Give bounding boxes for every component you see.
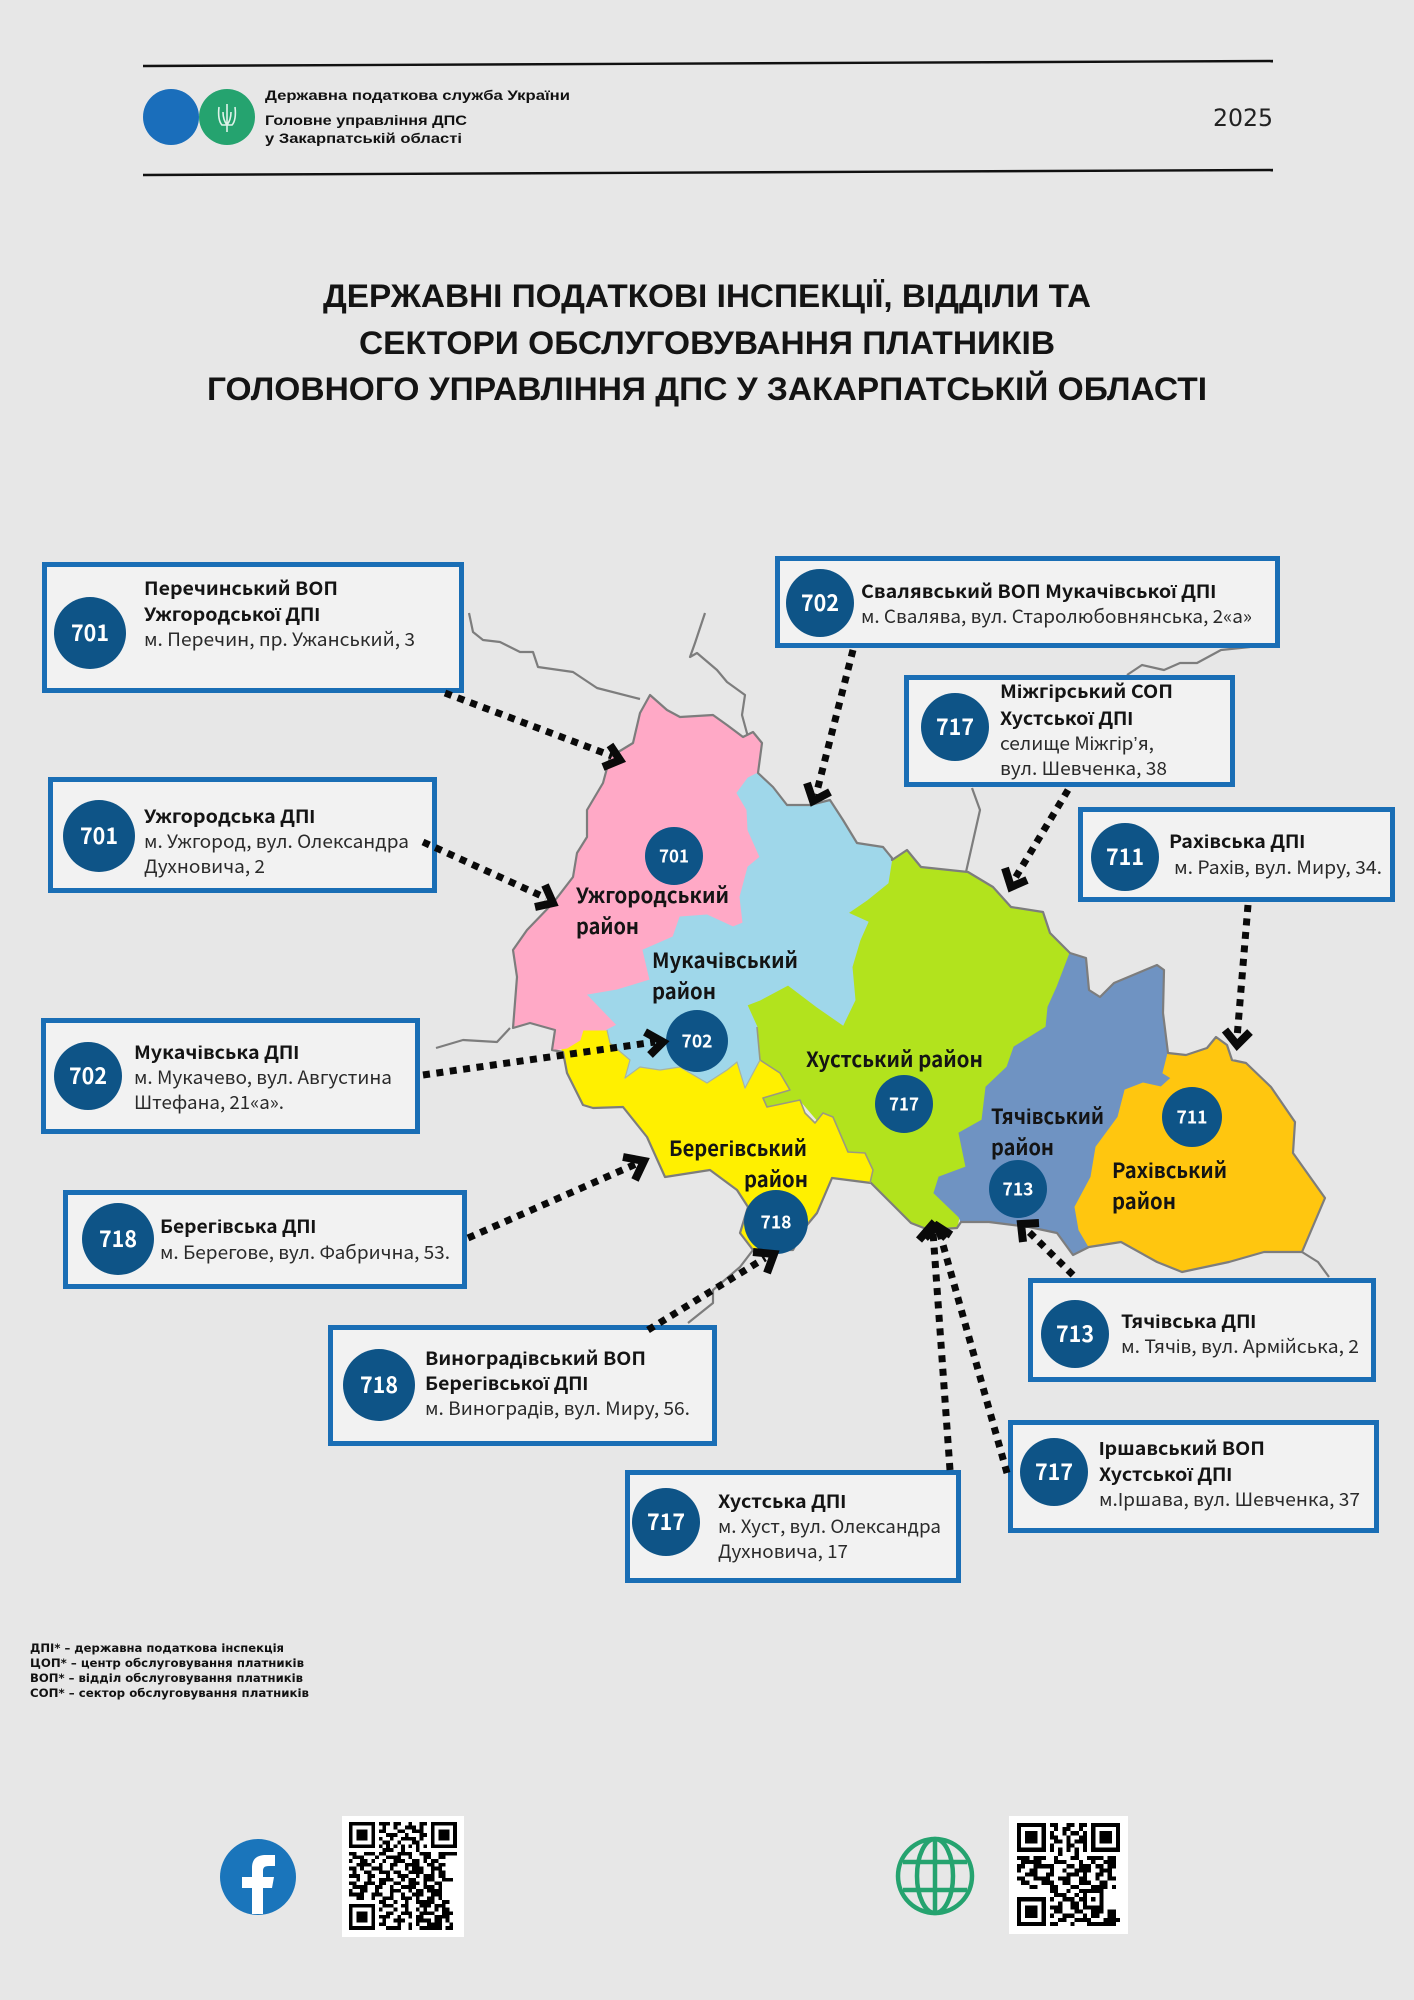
district labels: Рахівський <box>1112 1155 1227 1185</box>
title: СЕКТОРИ ОБСЛУГОВУВАННЯ ПЛАТНИКІВ <box>359 325 1055 361</box>
callout: Vynohradiv: м. Виноградів, вул. Миру, 56. <box>425 1395 690 1421</box>
callout: Uzhhorod: м. Ужгород, вул. Олександра <box>144 828 409 854</box>
callout: Mukachevo: Штефана, 21«а». <box>134 1089 284 1115</box>
icon: globe <box>898 1839 972 1913</box>
callout: Vynohradiv: Виноградівський ВОП <box>425 1345 646 1371</box>
callout: Uzhhorod: 701 <box>80 817 118 851</box>
district labels: район <box>744 1164 808 1194</box>
QR code: website <box>1009 1816 1128 1934</box>
callout: Uzhhorod <box>50 780 434 890</box>
organisation name: у Закарпатській області <box>265 130 462 146</box>
organisation name: Державна податкова служба України <box>265 87 570 103</box>
callout: Vynohradiv: Берегівської ДПІ <box>425 1370 588 1396</box>
map code badges: 717 <box>889 1090 919 1116</box>
map of Zakarpattia districts <box>436 613 1329 1323</box>
callout: Khust <box>628 1472 958 1580</box>
district labels: Берегівський <box>669 1133 807 1163</box>
callout: Tiachiv: Тячівська ДПІ <box>1121 1308 1256 1334</box>
arrow: Irshava to map <box>925 1226 1007 1473</box>
callout: Perechyn: Ужгородської ДПІ <box>144 601 320 627</box>
header band <box>143 61 1273 175</box>
callout: Irshava: Іршавський ВОП <box>1099 1435 1265 1461</box>
map code badges: 701 <box>659 842 689 868</box>
callout: Irshava <box>1010 1422 1376 1530</box>
callout: Mukachevo: Мукачівська ДПІ <box>134 1039 299 1065</box>
district: Berehove <box>558 1015 873 1250</box>
neighbouring border lines <box>436 613 1329 1323</box>
year: 2025 <box>1213 104 1273 132</box>
callout: Khust: Духновича, 17 <box>718 1538 848 1564</box>
arrow: Vynohradiv to badge <box>648 1252 774 1330</box>
arrow: Rakhiv to map <box>1225 905 1250 1045</box>
callout: Berehove <box>66 1192 464 1286</box>
callout: Mizhhiria: Хустської ДПІ <box>1000 705 1133 731</box>
callout: Mizhhiria <box>906 678 1232 784</box>
title: ГОЛОВНОГО УПРАВЛІННЯ ДПС У ЗАКАРПАТСЬКІЙ ОБЛАСТІ <box>207 371 1207 407</box>
footnote abbreviations: ВОП* – відділ обслуговування платників <box>30 1671 303 1685</box>
district labels: Хустський район <box>806 1044 983 1074</box>
footnote abbreviations: ЦОП* – центр обслуговування платників <box>30 1656 304 1670</box>
arrow: Perechyn to map <box>445 693 620 767</box>
callout: Perechyn: м. Перечин, пр. Ужанський, 3 <box>144 626 415 652</box>
district: Mukachevo <box>588 773 892 1088</box>
outer and inner border outline <box>513 695 1325 1272</box>
callout: Perechyn <box>44 564 462 690</box>
callout: Irshava: 717 <box>1035 1453 1073 1487</box>
callout: Vynohradiv <box>330 1328 714 1444</box>
district labels <box>576 880 1227 1216</box>
callout: Tiachiv: 713 <box>1056 1315 1094 1349</box>
callout: Mukachevo: 702 <box>69 1057 107 1091</box>
callout: Uzhhorod: Ужгородська ДПІ <box>144 803 315 829</box>
district: Uzhhorod <box>513 695 762 1050</box>
callout: Perechyn: 701 <box>71 614 109 648</box>
arrow: Mukachevo to badge <box>423 1032 663 1075</box>
district labels: район <box>991 1132 1054 1162</box>
callout: Khust: 717 <box>647 1503 685 1537</box>
callout: Mizhhiria: Міжгірський СОП <box>1000 678 1173 704</box>
organisation name <box>265 87 570 146</box>
callout: Rakhiv: м. Рахів, вул. Миру, 34. <box>1174 854 1382 880</box>
callout: Mukachevo <box>44 1020 418 1132</box>
callout: Tiachiv <box>1030 1280 1374 1380</box>
callout: Mukachevo: м. Мукачево, вул. Августина <box>134 1064 392 1090</box>
arrow: Mizhhiria to map <box>1005 790 1068 887</box>
callout: Khust: м. Хуст, вул. Олександра <box>718 1513 941 1539</box>
district labels: район <box>576 911 639 941</box>
callout: Svaliava: 702 <box>801 584 839 618</box>
footnote abbreviations <box>30 1641 309 1700</box>
callout: Perechyn: Перечинський ВОП <box>144 575 338 601</box>
district: Khust <box>747 850 1070 1230</box>
map code badges: 711 <box>1176 1104 1208 1130</box>
arrow: Uzhhorod to map <box>423 842 553 907</box>
footnote abbreviations: СОП* – сектор обслуговування платників <box>30 1686 309 1700</box>
district: Tiachiv <box>934 953 1171 1255</box>
icon: blue logo circle <box>143 89 199 145</box>
callout: Berehove: 718 <box>99 1220 137 1254</box>
callout: Rakhiv <box>1080 810 1392 900</box>
callout: Uzhhorod: Духновича, 2 <box>144 853 265 879</box>
title <box>207 278 1207 407</box>
district labels: Тячівський <box>991 1101 1104 1131</box>
callout: Svaliava: Свалявський ВОП Мукачівської ДПІ <box>861 578 1216 604</box>
arrow: Khust to map <box>919 1225 950 1470</box>
map code badges <box>645 827 1222 1254</box>
map code badges: 713 <box>1002 1176 1034 1202</box>
callout: Berehove: Берегівська ДПІ <box>160 1213 316 1239</box>
callout: Mizhhiria: 717 <box>936 708 974 742</box>
callout: Rakhiv: Рахівська ДПІ <box>1169 828 1305 854</box>
callout: Irshava: м.Іршава, вул. Шевченка, 37 <box>1099 1486 1360 1512</box>
callout: Svaliava <box>778 558 1278 646</box>
callout: Khust: Хустська ДПІ <box>718 1488 846 1514</box>
district labels: район <box>1112 1186 1176 1216</box>
icon: facebook <box>220 1839 296 1915</box>
arrow: Svaliava to map <box>807 650 853 801</box>
map code badges: 718 <box>760 1208 792 1234</box>
organisation name: Головне управління ДПС <box>265 112 467 128</box>
district labels: Мукачівський <box>652 945 798 975</box>
callout: Svaliava: м. Свалява, вул. Старолюбовнянська, 2«а» <box>861 603 1252 629</box>
callout: Mizhhiria: селище Міжгір’я, <box>1000 730 1154 756</box>
callout: Tiachiv: м. Тячів, вул. Армійська, 2 <box>1121 1333 1359 1359</box>
QR code: facebook <box>342 1816 464 1937</box>
map code badges: 702 <box>682 1028 712 1054</box>
district labels: Ужгородський <box>576 880 729 910</box>
callout: Irshava: Хустської ДПІ <box>1099 1461 1232 1487</box>
title: ДЕРЖАВНІ ПОДАТКОВІ ІНСПЕКЦІЇ, ВІДДІЛИ ТА <box>323 278 1091 314</box>
district labels: район <box>652 976 716 1006</box>
callout: Berehove: м. Берегове, вул. Фабрична, 53. <box>160 1239 450 1265</box>
icon: green logo circle with trident <box>199 89 255 145</box>
callout: Vynohradiv: 718 <box>360 1366 398 1400</box>
arrow: Berehove to map <box>468 1157 644 1238</box>
callout: Rakhiv: 711 <box>1106 838 1144 872</box>
footnote abbreviations: ДПІ* – державна податкова інспекція <box>30 1641 284 1655</box>
arrow: Tiachiv to badge <box>1021 1223 1073 1275</box>
callout: Mizhhiria: вул. Шевченка, 38 <box>1000 755 1167 781</box>
district: Rakhiv <box>1075 1037 1325 1272</box>
